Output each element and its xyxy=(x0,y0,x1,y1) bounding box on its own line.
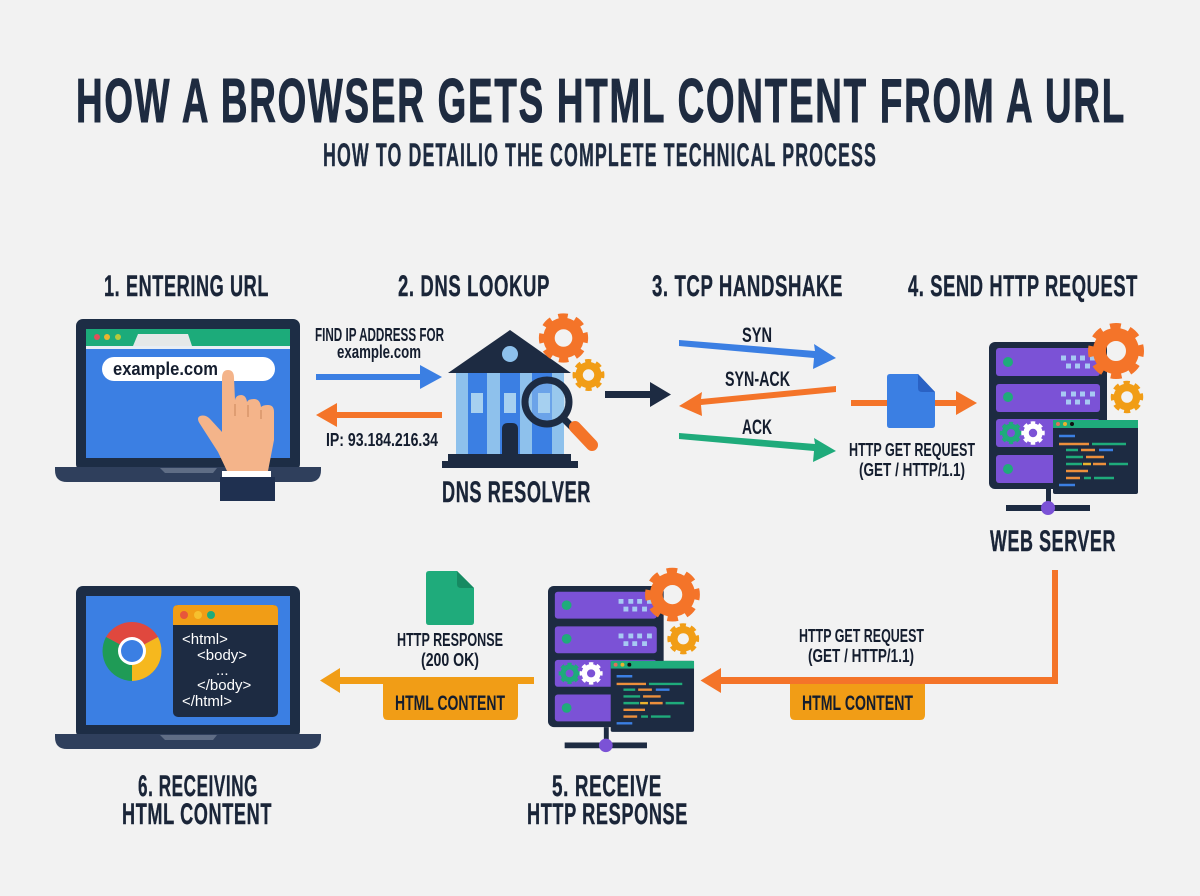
icon: DNS resolver building xyxy=(442,330,578,468)
icon: web server xyxy=(989,326,1142,515)
code window xyxy=(173,605,278,717)
label: HTTP GET request xyxy=(849,440,975,480)
label: find IP address xyxy=(315,325,444,362)
icon: laptop receiving HTML xyxy=(55,586,321,749)
label: HTTP GET request bottom: (GET / HTTP/1.1) xyxy=(808,646,914,666)
label: step 5: 5. RECEIVE xyxy=(552,770,662,803)
heading: step 1: 1. ENTERING URL xyxy=(104,270,269,303)
arrow: request to DNS xyxy=(316,365,442,389)
label: IP address: IP: 93.184.216.34 xyxy=(326,430,438,450)
label: SYN-ACK: SYN-ACK xyxy=(725,368,790,391)
tag: HTML content left: HTML CONTENT xyxy=(395,692,505,715)
label: step 5 xyxy=(527,770,688,831)
code window: </html> xyxy=(182,693,232,710)
icon: hand pointing xyxy=(198,370,275,501)
label: find IP address: example.com xyxy=(337,342,421,362)
arrow: response from DNS xyxy=(316,403,442,427)
tag: HTML content right xyxy=(790,684,925,720)
label: HTTP response: (200 OK) xyxy=(421,650,479,670)
code window: </body> xyxy=(197,677,251,694)
code window: ... xyxy=(216,662,229,679)
arrow: ACK xyxy=(679,433,836,462)
arrow: HTTP request to server xyxy=(851,391,977,415)
label: HTTP GET request bottom xyxy=(799,626,924,666)
heading: step 3: 3. TCP HANDSHAKE xyxy=(652,270,843,303)
code window: <html> xyxy=(182,631,228,648)
label: step 6 xyxy=(122,770,272,831)
icon: magnifying glass xyxy=(525,380,592,445)
arrow: DNS to TCP xyxy=(605,382,671,407)
label: step 6: HTML CONTENT xyxy=(122,798,272,831)
label: HTTP response: HTTP RESPONSE xyxy=(397,630,503,650)
label: HTTP GET request: (GET / HTTP/1.1) xyxy=(859,460,965,480)
label: HTTP response xyxy=(397,630,503,670)
text: typed URL: example.com xyxy=(113,358,218,379)
arrow: SYN-ACK xyxy=(679,386,836,416)
arrow: response to browser xyxy=(320,668,534,693)
icon: gears DNS xyxy=(542,316,603,389)
code window: <body> xyxy=(197,647,247,664)
label: HTTP GET request: HTTP GET REQUEST xyxy=(849,440,975,460)
label: DNS resolver: DNS RESOLVER xyxy=(442,476,591,509)
arrow: response path to receiving server xyxy=(700,570,1058,693)
label: HTTP GET request bottom: HTTP GET REQUEST xyxy=(799,626,924,646)
arrow: SYN xyxy=(679,340,836,369)
tag: HTML content right: HTML CONTENT xyxy=(802,692,913,715)
icon: laptop entering URL xyxy=(55,319,321,482)
icon: browser logo xyxy=(103,622,161,681)
label: step 5: HTTP RESPONSE xyxy=(527,798,688,831)
icon: blue document xyxy=(887,374,935,428)
label: find IP address: FIND IP ADDRESS FOR xyxy=(315,325,444,345)
heading: step 2: 2. DNS LOOKUP xyxy=(398,270,550,303)
label: ACK: ACK xyxy=(742,416,772,439)
icon: green document xyxy=(426,571,474,625)
icon: receiving server xyxy=(548,571,697,752)
tag: HTML content left xyxy=(383,684,518,720)
label: step 6: 6. RECEIVING xyxy=(138,770,258,803)
label: SYN: SYN xyxy=(742,324,772,347)
label: web server: WEB SERVER xyxy=(990,525,1116,558)
